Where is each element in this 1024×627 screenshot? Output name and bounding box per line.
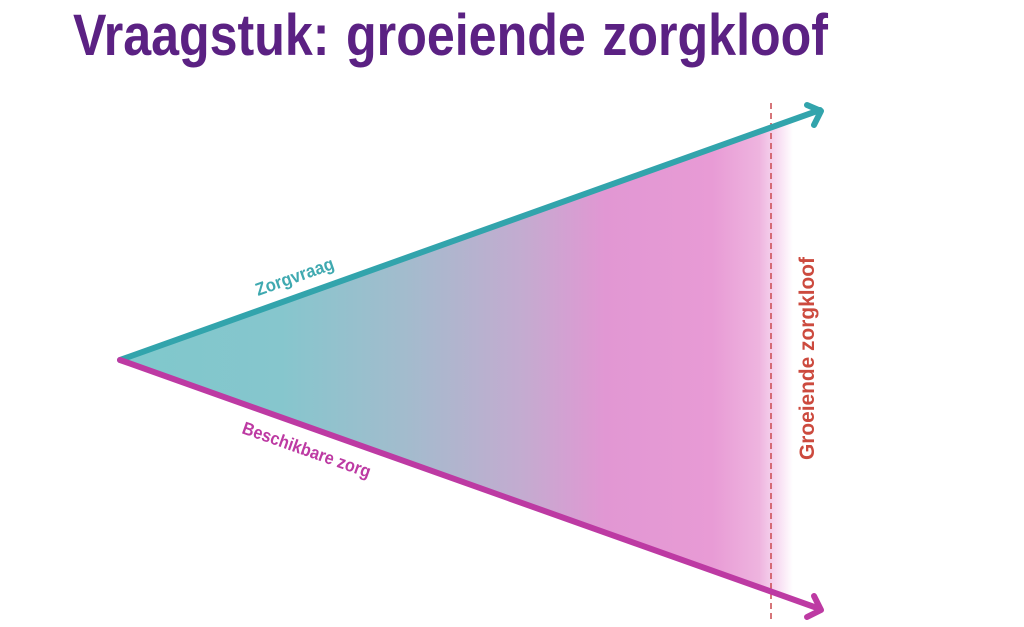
label: zorgvraag: Zorgvraag — [253, 254, 337, 300]
dashed line: measurement of the gap — [770, 103, 772, 620]
arrow: zorgvraag — [120, 105, 821, 360]
gradient wedge: zorgkloof — [120, 119, 793, 600]
label: beschikbare zorg: Beschikbare zorg — [240, 418, 374, 482]
arrow: beschikbare zorg — [120, 360, 821, 617]
title: Vraagstuk: groeiende zorgkloof — [73, 3, 829, 68]
label: groeiende zorgkloof: Groeiende zorgkloof — [796, 256, 819, 460]
